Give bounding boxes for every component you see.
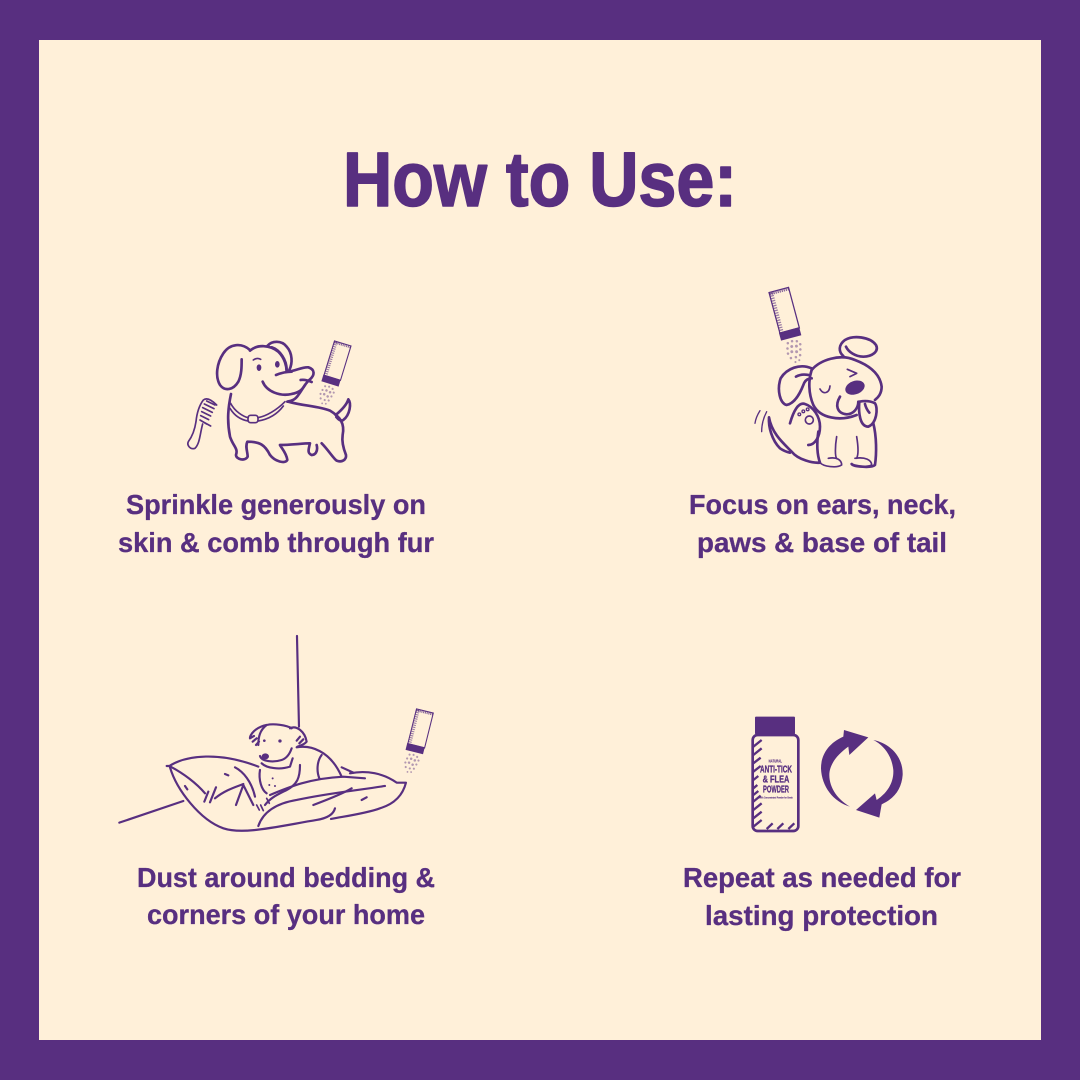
icon: powder shaker [315,341,351,407]
step 1: sprinkle and comb [118,341,434,558]
icon: product bottle: NATURAL [769,758,782,763]
step 1 caption [118,489,434,558]
icon: powder shaker [400,709,433,775]
step 3 caption: Dust around bedding & [137,862,435,893]
step 1 caption: Sprinkle generously on [126,489,426,520]
step 4 caption: Repeat as needed for [683,862,961,893]
icon: dog on cushion in room corner [119,636,406,831]
step 2 caption [689,489,956,558]
icon: product bottle: With Concentrated Powder for Break [759,796,793,800]
step 3: bedding and corners [119,636,435,930]
step 4 caption: lasting protection [705,900,938,931]
step 2 caption: Focus on ears, neck, [689,489,956,520]
step 1 caption: skin & comb through fur [118,527,434,558]
step 2: focus areas [689,287,956,558]
icon: puppy scratching [755,337,882,467]
step 4 caption [683,862,961,931]
icon: powder shaker [768,287,808,365]
title: How to Use: [343,137,737,223]
step 2 caption: paws & base of tail [697,527,947,558]
icon: product bottle: ANTI-TICK [760,765,792,776]
icon: dachshund dog with comb [188,342,350,462]
icon: product bottle [753,717,798,831]
icon: product bottle: POWDER [763,785,789,796]
step 3 caption [137,862,435,930]
step 4: repeat [683,717,961,931]
icon: product bottle: & FLEA [763,775,790,786]
icon: circular repeat arrows [821,730,903,818]
step 3 caption: corners of your home [147,899,425,930]
